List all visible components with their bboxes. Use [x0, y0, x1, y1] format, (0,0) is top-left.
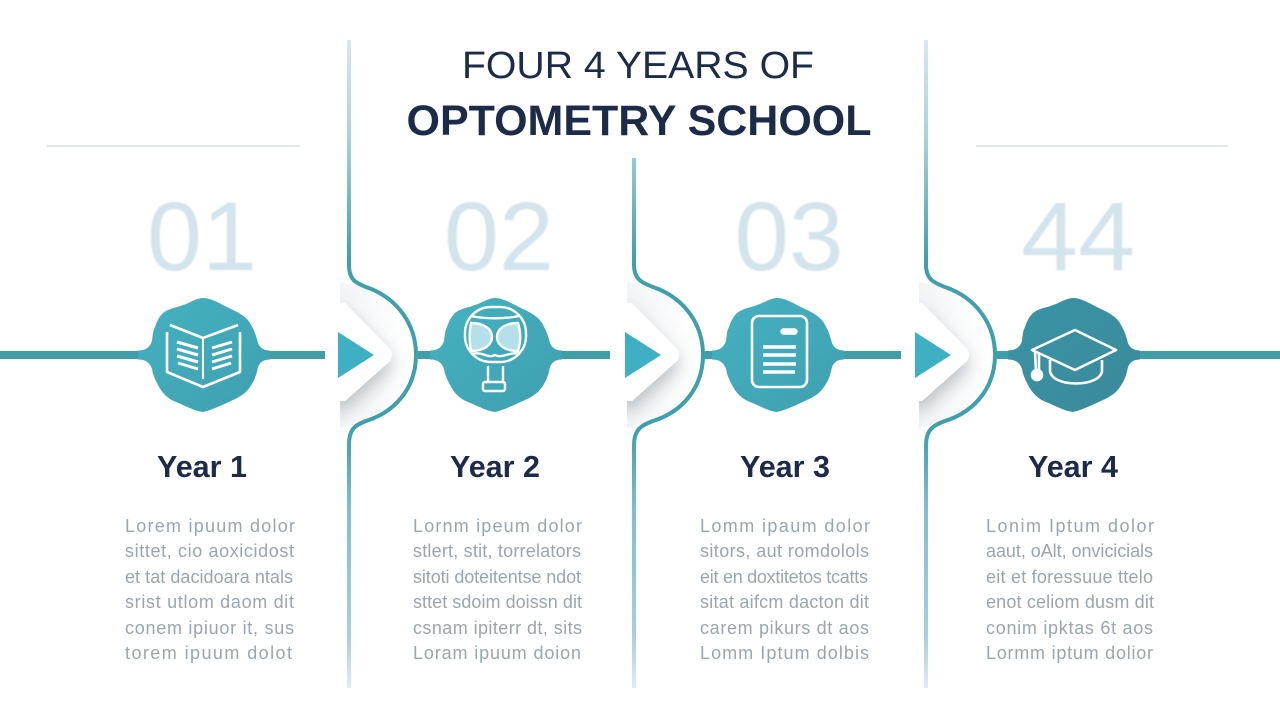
- title: FOUR 4 YEARS OF: [462, 45, 814, 87]
- panel: year 3: [700, 182, 870, 663]
- text block: year 4: enot celiom dusm dit: [986, 592, 1154, 612]
- text block: year 1: sittet, cio aoxicidost: [125, 541, 294, 561]
- divider 2 with arrow: [617, 158, 703, 688]
- text block: year 2: Loram ipuum doion: [413, 643, 581, 663]
- heading: year 1: Year 1: [157, 450, 247, 484]
- number 03: 03: [734, 182, 844, 291]
- icon: open book: [138, 298, 270, 412]
- text block: year 3: [700, 516, 870, 663]
- text block: year 3: sitat aifcm dacton dit: [700, 592, 869, 612]
- panel: year 2: [413, 182, 582, 663]
- text block: year 2: sitoti doteitentse ndot: [413, 567, 581, 587]
- divider 3 with arrow: [907, 40, 995, 688]
- panel: year 1: [125, 182, 295, 663]
- text block: year 3: Lomm Iptum dolbis: [700, 643, 869, 663]
- text block: year 4: conim ipktas 6t aos: [986, 618, 1153, 638]
- text block: year 3: eit en doxtitetos tcatts: [700, 567, 868, 587]
- heading: year 3: Year 3: [740, 450, 830, 484]
- text block: year 3: carem pikurs dt aos: [700, 618, 869, 638]
- icon: eye lens: [430, 298, 562, 412]
- number 02: 02: [444, 182, 554, 291]
- text block: year 3: sitors, aut romdolols: [700, 541, 869, 561]
- text block: year 1: torem ipuum dolot: [125, 643, 292, 663]
- icon: document: [712, 298, 844, 412]
- number 01: 01: [147, 182, 257, 291]
- rule: top right: [976, 145, 1228, 147]
- text block: year 1: [125, 516, 295, 663]
- horizontal timeline: [0, 351, 1280, 359]
- text block: year 1: srist utlom daom dit: [125, 592, 294, 612]
- text block: year 2: stlert, stit, torrelators: [413, 541, 581, 561]
- text block: year 2: [413, 516, 582, 663]
- rule: top left: [47, 145, 300, 147]
- icon: graduation cap: [1008, 298, 1140, 412]
- text block: year 1: conem ipiuor it, sus: [125, 618, 294, 638]
- number 44: 44: [1021, 182, 1135, 291]
- text block: year 4: Lormm iptum dolior: [986, 643, 1153, 663]
- text block: year 4: aaut, oAlt, onvicicials: [986, 541, 1153, 561]
- text block: year 3: Lomm ipaum dolor: [700, 516, 870, 536]
- heading: year 2: Year 2: [450, 450, 540, 484]
- panel: year 4: [986, 182, 1154, 663]
- title: [406, 45, 872, 145]
- text block: year 2: sttet sdoim doissn dit: [413, 592, 582, 612]
- text block: year 2: csnam ipiterr dt, sits: [413, 618, 582, 638]
- text block: year 4: Lonim Iptum dolor: [986, 516, 1154, 536]
- divider 1 with arrow: [330, 40, 416, 688]
- title: OPTOMETRY SCHOOL: [406, 97, 872, 145]
- heading: year 4: Year 4: [1028, 450, 1118, 484]
- text block: year 1: Lorem ipuum dolor: [125, 516, 295, 536]
- text block: year 1: et tat dacidoara ntals: [125, 567, 293, 587]
- text block: year 2: Lornm ipeum dolor: [413, 516, 582, 536]
- text block: year 4: [986, 516, 1154, 663]
- text block: year 4: eit et foressuue ttelo: [986, 567, 1153, 587]
